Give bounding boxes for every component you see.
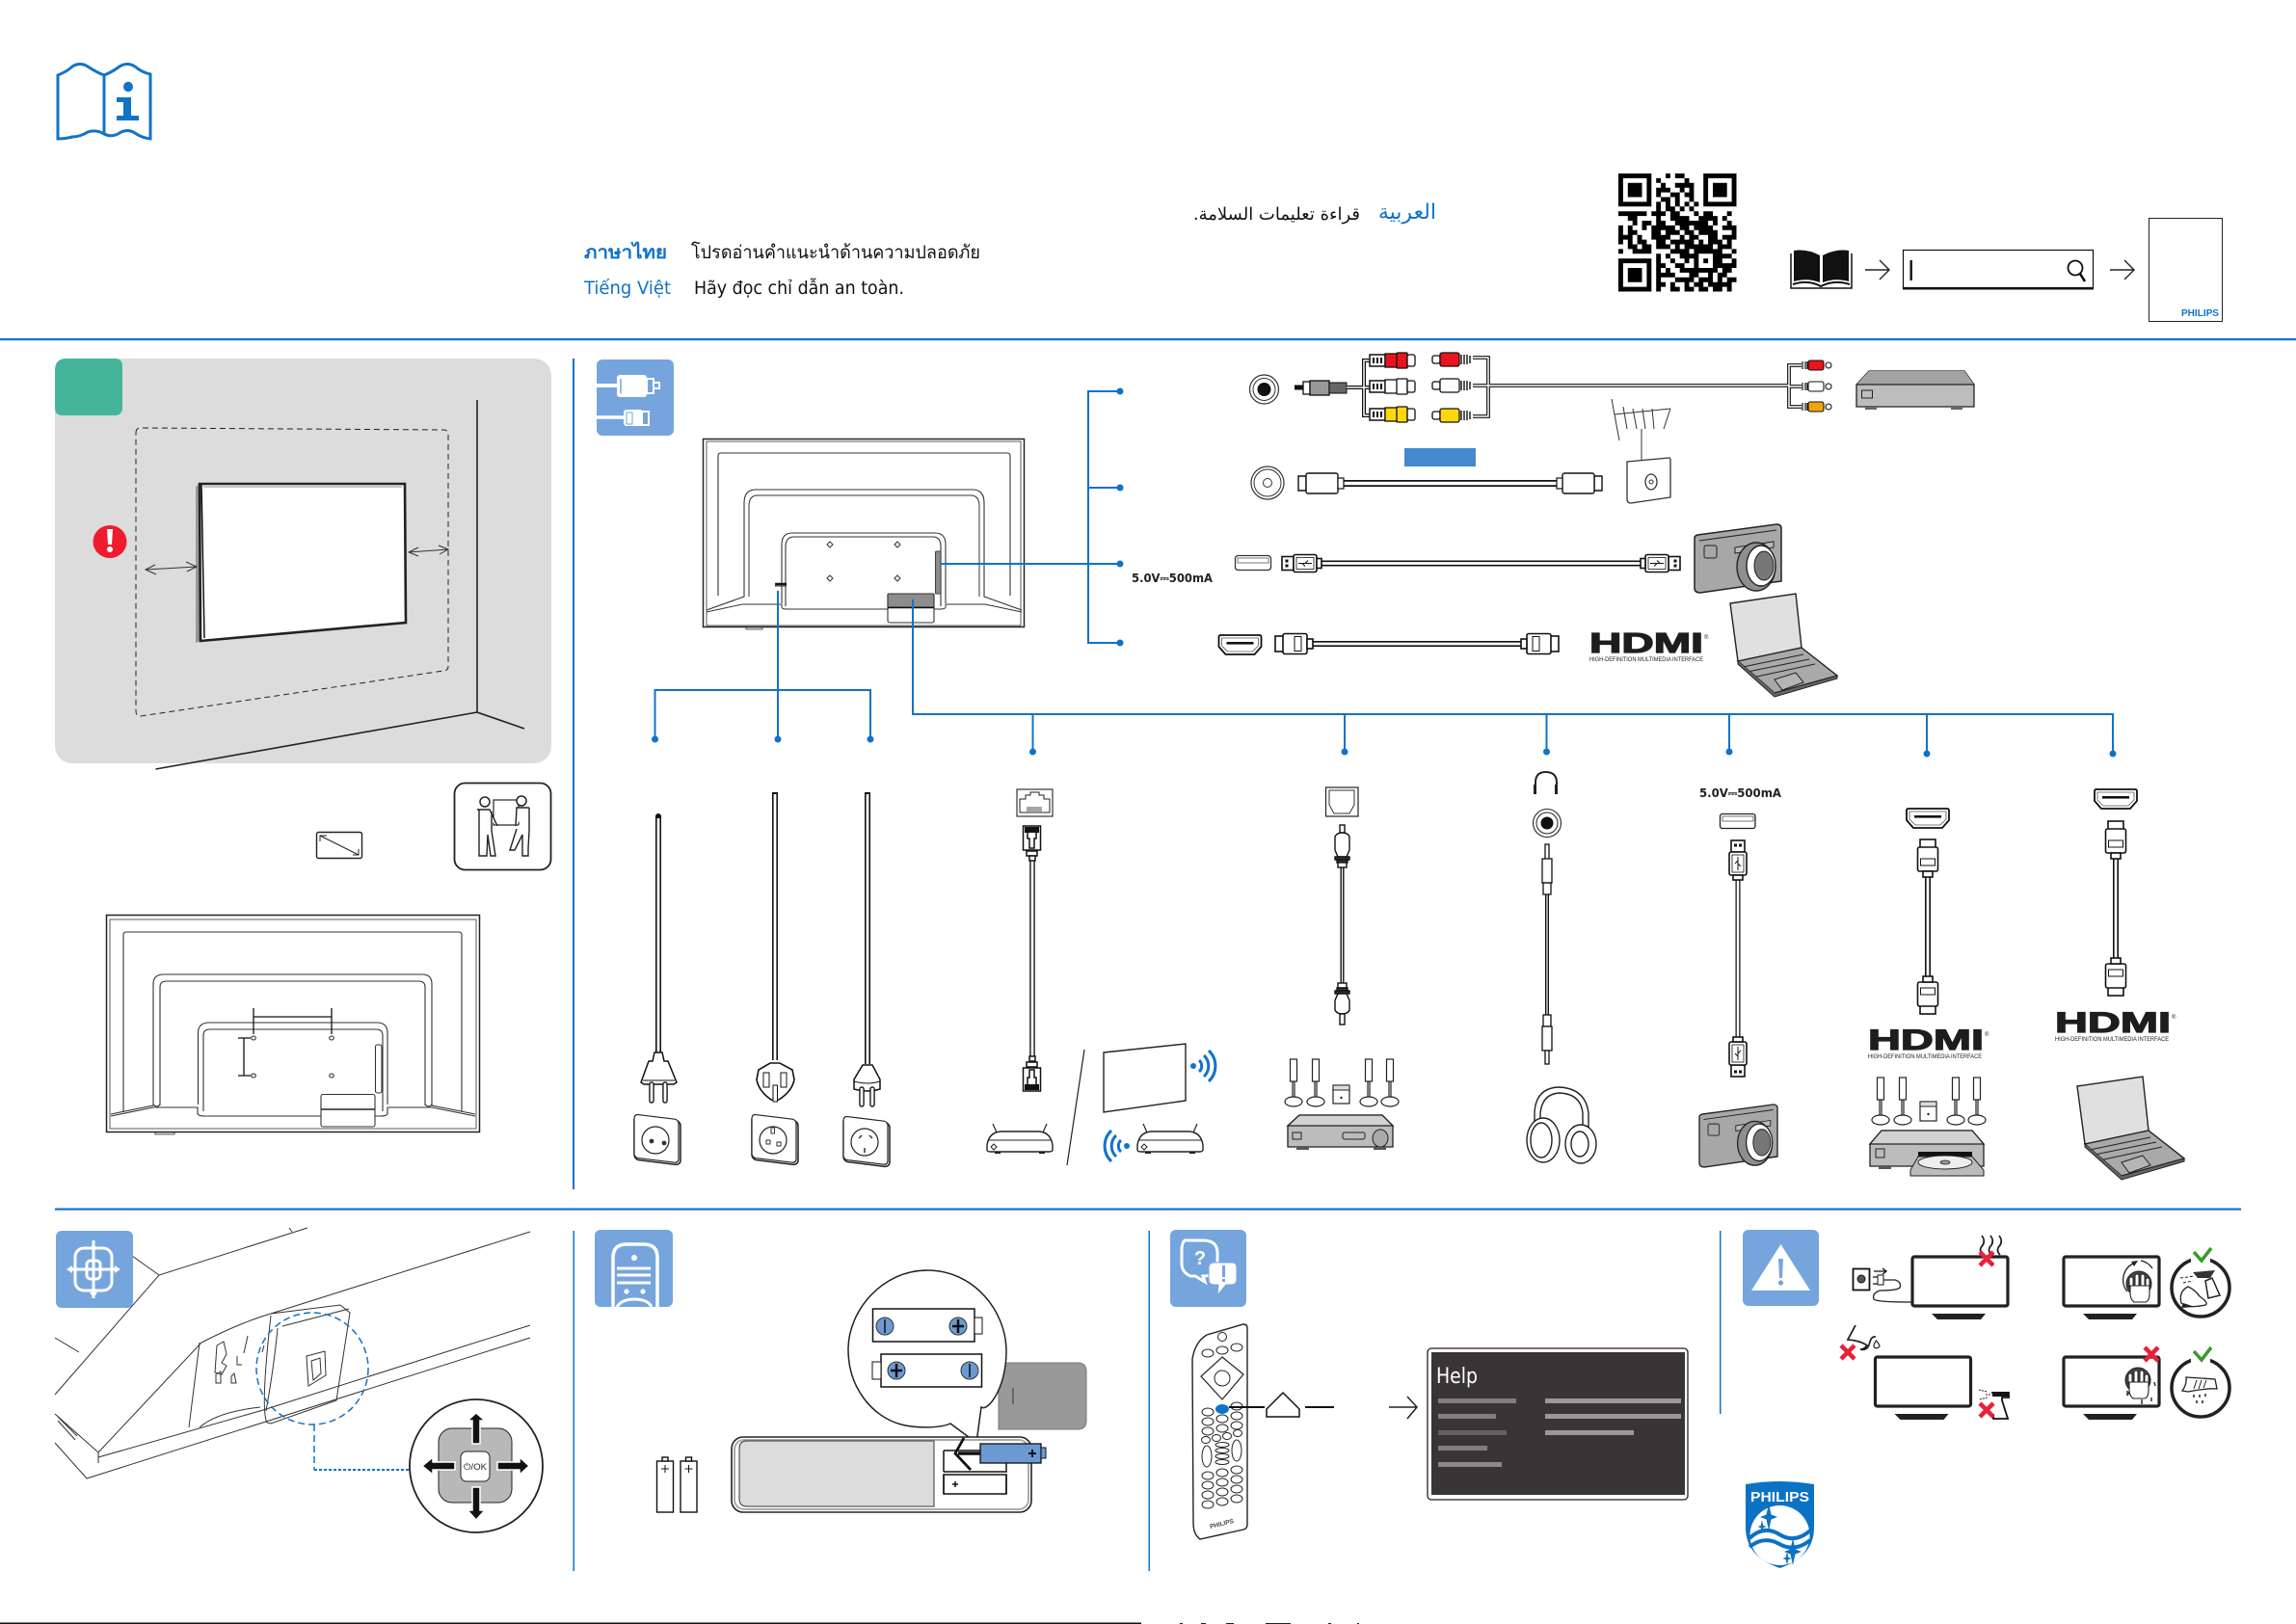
wall mounted TV <box>196 484 406 643</box>
antenna and wall plate <box>1612 399 1670 503</box>
icon tab: questions: ? <box>1194 1248 1206 1269</box>
column: HDMI home theatre <box>1868 809 1989 1176</box>
LAN socket <box>1017 789 1053 816</box>
HDMI logo: HIGH-DEFINITION MULTIMEDIA INTERFACE <box>2055 1037 2169 1043</box>
manual booklet: PHILIPS <box>2181 308 2219 319</box>
socket <box>634 1114 681 1165</box>
disc player <box>1870 1131 1984 1176</box>
column: power plug type 3 <box>843 792 890 1167</box>
HDMI logo: HIGH-DEFINITION MULTIMEDIA INTERFACE <box>1868 1054 1982 1060</box>
help screen <box>1428 1348 1688 1500</box>
callout dashed leader <box>256 1313 410 1470</box>
panel: safety warnings <box>1743 1230 2229 1568</box>
remote rear with battery <box>732 1437 1046 1512</box>
instruction: wipe dry <box>2064 1248 2229 1319</box>
arrow: search to manual <box>2110 260 2134 280</box>
QR code <box>1618 175 1737 289</box>
small headphone icon <box>1535 772 1557 790</box>
USB cable <box>1282 555 1680 572</box>
callout: joystick button <box>410 1399 543 1532</box>
HDMI logo <box>1589 628 1709 663</box>
USB port <box>1720 813 1755 829</box>
HDMI cable <box>1275 634 1559 653</box>
HDMI logo: ® <box>1985 1031 1989 1038</box>
icon tab: control <box>56 1231 133 1308</box>
column: power plug type 1 <box>634 816 681 1165</box>
HDMI logo <box>1868 1025 1989 1060</box>
arrow: left clearance <box>146 562 197 574</box>
TV rear VESA drawing <box>106 916 480 1134</box>
text: Vietnamese safety reading notice: Tiếng Việt <box>583 278 671 299</box>
TV underside sketch <box>55 1228 530 1478</box>
help screen: Help <box>1436 1365 1478 1389</box>
optical cable <box>1335 825 1349 1025</box>
text: Arabic safety reading notice: قراءة تعليمات السلامة. <box>1193 204 1360 225</box>
panel: control button <box>55 1228 543 1532</box>
speakers <box>1285 1059 1399 1106</box>
HDMI cable <box>2105 821 2126 996</box>
wifi waves right <box>1190 1051 1215 1081</box>
HDMI logo: HDMI <box>1589 628 1703 659</box>
row: HDMI laptop connection <box>1218 594 1837 697</box>
voltage label: 5.0V⎓500mA <box>1699 786 1782 800</box>
AAA batteries <box>657 1457 697 1512</box>
text: Vietnamese safety reading notice <box>583 277 904 299</box>
TV rear connection diagram <box>704 439 1024 629</box>
HDMI logo: HDMI <box>1868 1025 1984 1056</box>
HDMI logo: HDMI <box>2055 1007 2171 1039</box>
arrow: book to search <box>1865 260 1889 280</box>
remote control <box>1192 1324 1247 1539</box>
LAN cable <box>1024 826 1041 1091</box>
laptop <box>2077 1077 2184 1180</box>
blue connector leader lines <box>652 387 2117 758</box>
HDMI logo: ® <box>2172 1014 2176 1021</box>
icon: screen diagonal <box>316 833 362 858</box>
callout: joystick button: ⏻/OK <box>464 1462 488 1473</box>
HDMI port <box>1218 635 1261 654</box>
icon tab: remote <box>595 1230 673 1307</box>
icon: open manual book <box>1791 251 1852 288</box>
gray cover <box>999 1363 1086 1429</box>
text: Vietnamese safety reading notice: Hãy đọc chỉ dẫn an toàn. <box>694 277 904 299</box>
text: Thai safety reading notice: ภาษาไทย <box>584 241 667 263</box>
panel: wall mounting scene <box>55 359 551 769</box>
HDMI port <box>1907 809 1949 828</box>
headphones <box>1527 1087 1596 1163</box>
logo: Philips shield <box>1746 1481 1814 1568</box>
row: AV composite connection <box>1249 353 1974 422</box>
search box <box>1903 251 2094 289</box>
clearance dashed boundary <box>136 428 448 716</box>
optical socket <box>1326 787 1358 816</box>
coax cable <box>1298 473 1602 493</box>
small RCA plugs <box>1802 360 1831 412</box>
divider slash <box>1067 1050 1084 1165</box>
warning: no wet cloth <box>2064 1347 2229 1420</box>
TV wireless <box>1104 1044 1186 1112</box>
headphone jack <box>1533 785 1562 837</box>
HDMI logo: ® <box>1704 634 1709 641</box>
blue label <box>1404 448 1476 466</box>
HDMI port <box>2095 789 2137 809</box>
warning: no heat, unplug <box>1853 1236 2008 1319</box>
HDMI cable <box>1918 839 1937 1014</box>
3.5mm cable <box>1542 844 1552 1064</box>
manual booklet <box>2149 218 2223 322</box>
coax jack <box>1251 466 1284 499</box>
socket <box>843 1116 890 1167</box>
remote control: PHILIPS <box>1210 1518 1235 1531</box>
icon tab: connections <box>597 359 674 436</box>
column: headphones <box>1527 772 1596 1163</box>
icon: read manual information book <box>58 64 150 139</box>
3.5mm plug <box>1295 381 1347 395</box>
column: USB camera <box>1699 786 1782 1167</box>
socket <box>752 1114 798 1165</box>
callout bubble: battery polarity <box>848 1270 1006 1443</box>
voltage label: 5.0V⎓500mA <box>1132 572 1214 585</box>
icon tab: questions <box>1170 1230 1246 1307</box>
camera <box>1695 524 1781 593</box>
logo: Philips shield: PHILIPS <box>1750 1489 1809 1505</box>
AV jack <box>1249 375 1278 404</box>
column: optical audio <box>1285 787 1399 1150</box>
text: Thai safety reading notice: โปรดอ่านคำแนะนำด้านความปลอดภัย <box>691 241 980 263</box>
warning: no liquids <box>1841 1325 2009 1420</box>
badge: green tab <box>55 359 122 415</box>
camera <box>1699 1105 1777 1167</box>
router wired <box>987 1124 1053 1154</box>
laptop <box>1730 594 1837 697</box>
text: Arabic safety reading notice <box>1193 200 1436 225</box>
arrow: right clearance <box>409 546 448 556</box>
row: antenna connection <box>1251 399 1670 503</box>
bottom crop edge <box>0 1623 1359 1624</box>
wifi waves left <box>1105 1131 1130 1161</box>
RCA splitter connectors <box>1370 353 1470 422</box>
text: Thai safety reading notice <box>584 241 980 263</box>
router wireless <box>1137 1124 1203 1154</box>
column: HDMI laptop <box>2055 789 2184 1180</box>
icon tab: warning <box>1743 1230 1819 1306</box>
row: USB camera connection <box>1132 524 1781 593</box>
icon: two people carrying TV <box>455 783 551 869</box>
column: power plug type 2 <box>752 792 798 1165</box>
AV receiver <box>1288 1115 1393 1150</box>
column: LAN network <box>987 789 1215 1165</box>
speakers <box>1872 1078 1986 1125</box>
AV device box <box>1856 371 1974 410</box>
USB port <box>1236 555 1270 571</box>
HDMI logo <box>2055 1007 2176 1043</box>
USB cable <box>1729 840 1747 1077</box>
icon: home key <box>1229 1393 1334 1417</box>
text: Arabic safety reading notice: العربية <box>1378 200 1436 225</box>
HDMI logo: HIGH-DEFINITION MULTIMEDIA INTERFACE <box>1589 657 1703 663</box>
panel: remote batteries <box>595 1230 1086 1512</box>
panel: help <box>1170 1230 1688 1539</box>
icon: warning <box>93 525 127 558</box>
arrow: home to help <box>1389 1397 1417 1419</box>
room corner lines <box>156 400 524 769</box>
